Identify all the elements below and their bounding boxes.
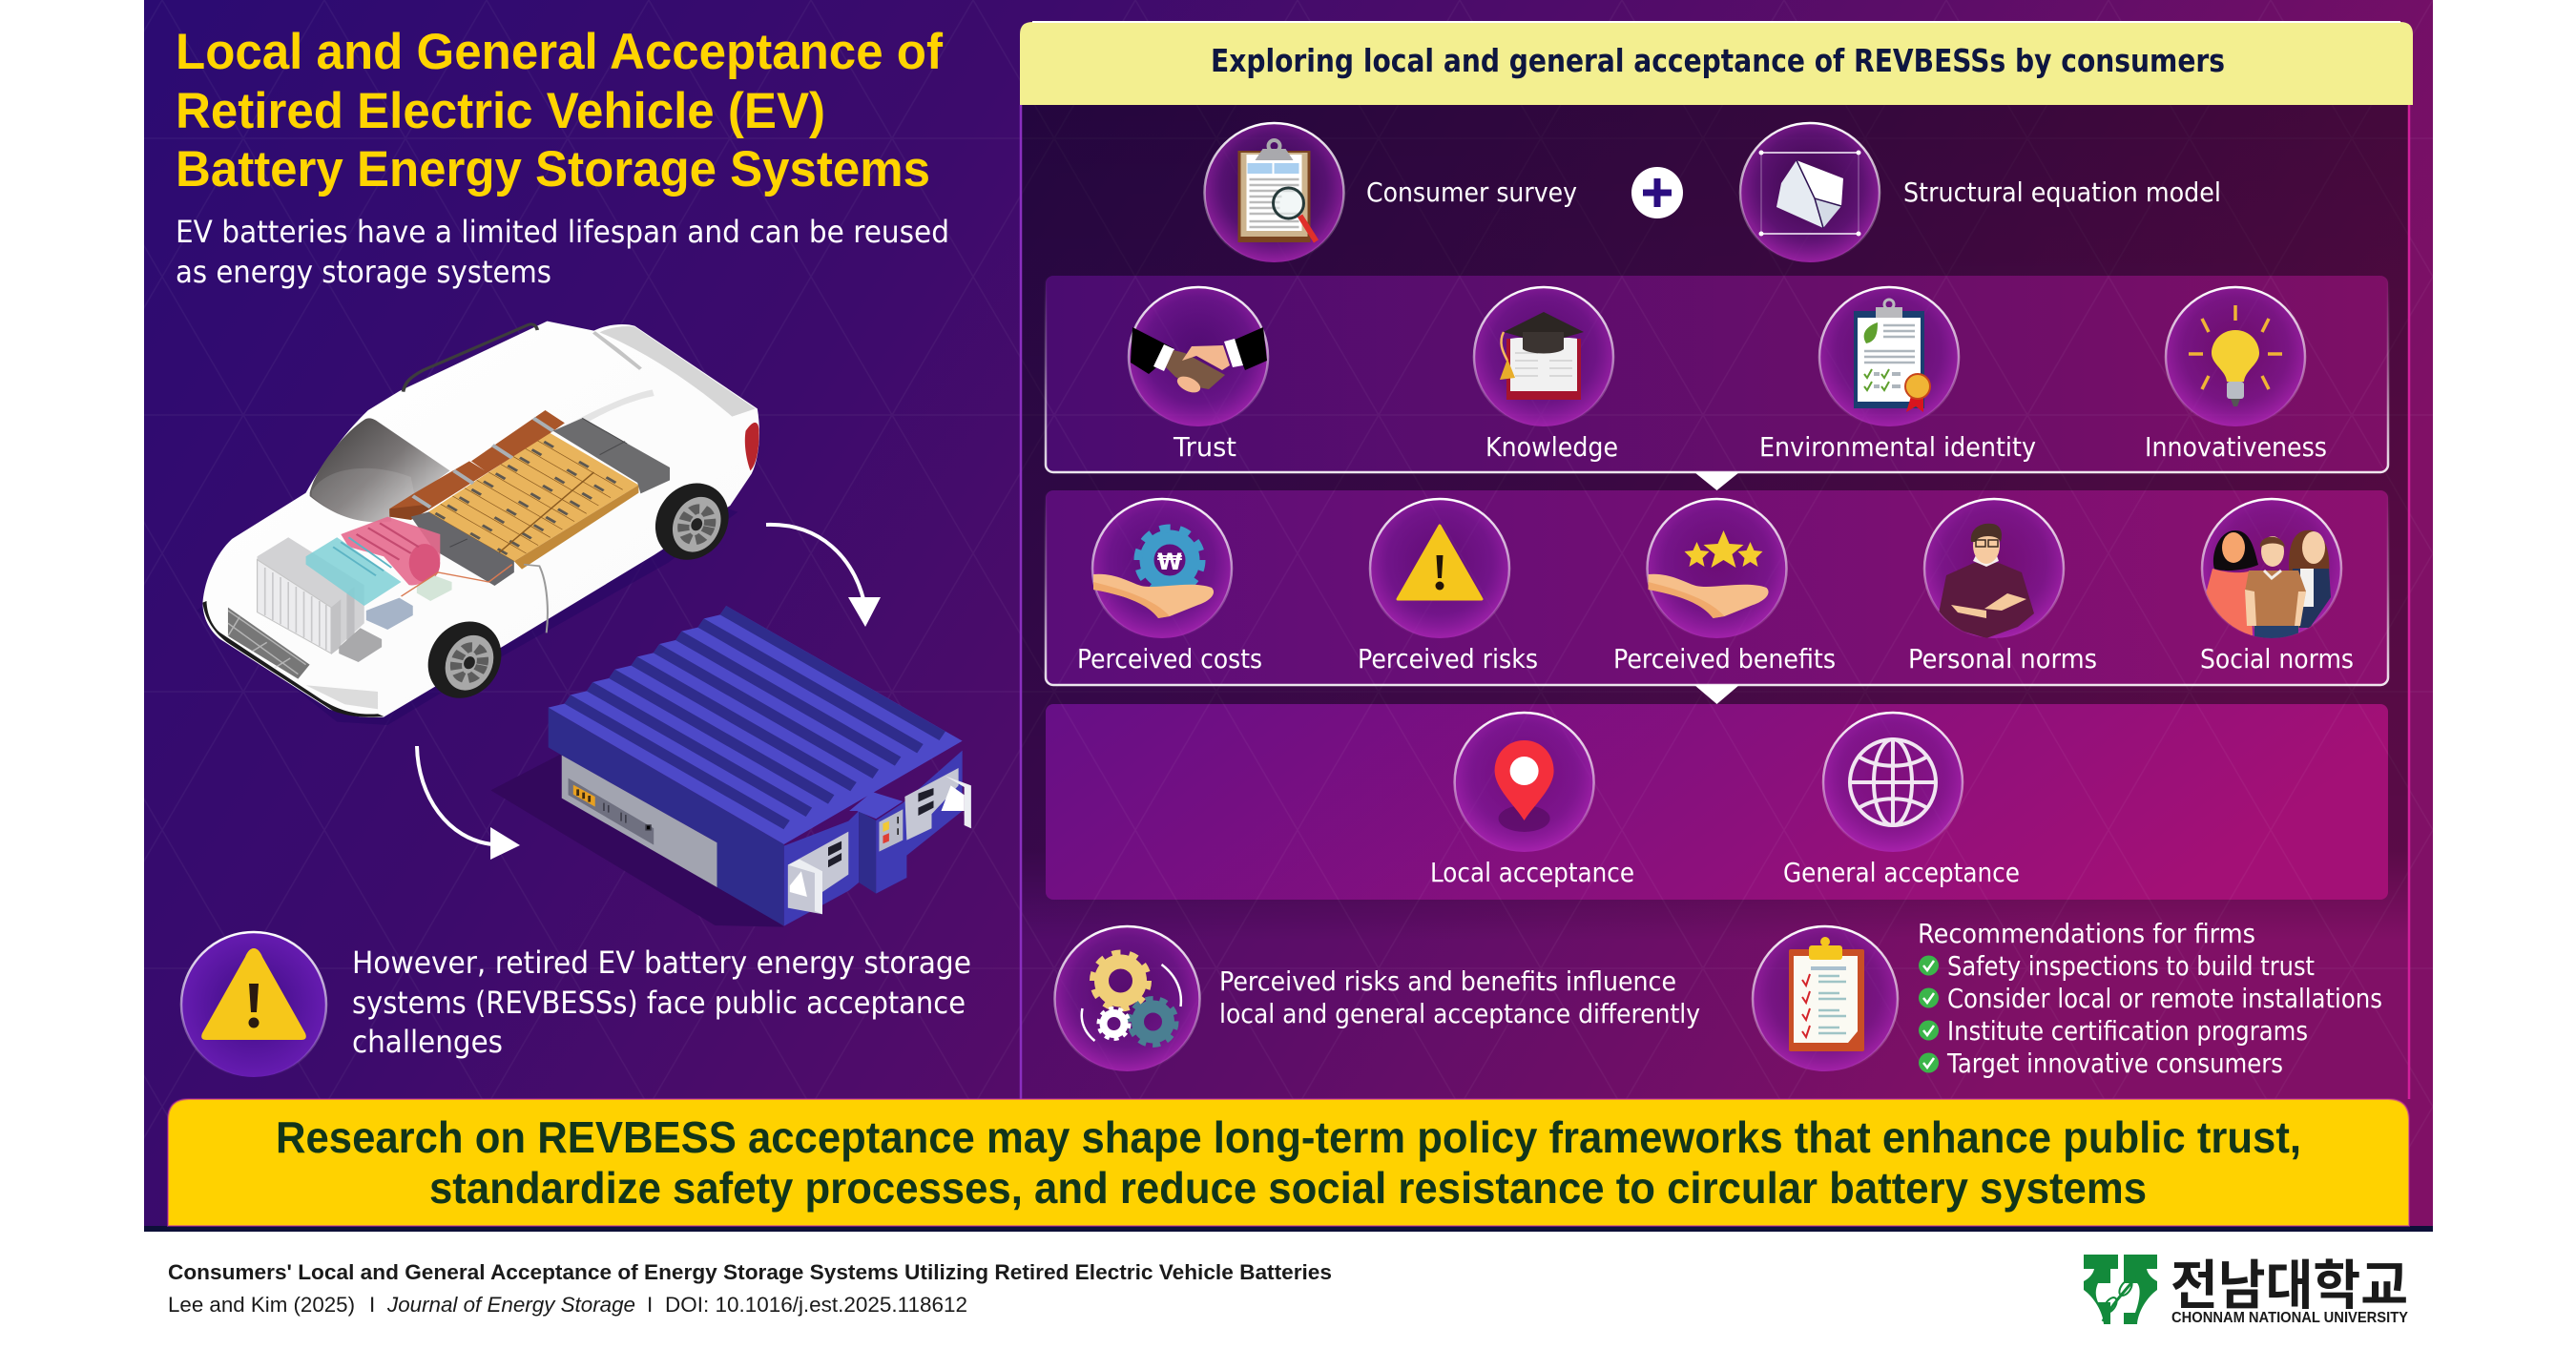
panel: acceptance outcomes	[1046, 704, 2388, 900]
brown modules	[389, 410, 565, 518]
text: finding: Perceived risks and benefits influence	[1219, 966, 1676, 997]
label: social norms: Social norms	[2200, 644, 2354, 674]
icon: plus	[1631, 167, 1683, 218]
label: trust: Trust	[1173, 432, 1236, 463]
icon: perceived risks	[1370, 499, 1509, 638]
icon: gears finding	[1055, 926, 1200, 1071]
conclusion banner	[168, 1099, 2409, 1226]
icon: personal norms	[1924, 499, 2064, 638]
title: Battery Energy Storage Systems	[176, 141, 930, 197]
text: structural equation model: Structural equation model	[1903, 177, 2221, 208]
icon: structural equation model	[1740, 123, 1880, 262]
icon: social norms	[2202, 499, 2341, 641]
label: environmental identity: Environmental identity	[1759, 432, 2036, 463]
intro text	[176, 214, 949, 290]
grey side panel	[562, 756, 717, 887]
text: finding	[1219, 966, 1700, 1029]
illustration: electric car with battery pack	[197, 322, 759, 725]
charging cable	[524, 565, 548, 633]
intro text: EV batteries have a limited lifespan and can be reused	[176, 214, 949, 250]
top fins	[549, 606, 963, 844]
recommendations list	[1918, 919, 2382, 1079]
label: knowledge: Knowledge	[1485, 432, 1618, 463]
citation: Consumers' Local and General Acceptance of Energy Storage Systems Utilizing Retired Electric Vehicle Batteries	[168, 1260, 1332, 1284]
label: perceived benefits: Perceived benefits	[1613, 644, 1836, 674]
recommendations list: Target innovative consumers	[1946, 1048, 2283, 1079]
intro text: as energy storage systems	[176, 254, 551, 290]
title: Local and General Acceptance of	[176, 24, 943, 80]
arrow: battery reuse	[417, 746, 520, 860]
text: finding: local and general acceptance differently	[1219, 999, 1700, 1029]
front face	[549, 708, 784, 926]
title	[176, 24, 943, 197]
panel: perceptions and norms	[1046, 490, 2388, 685]
arrow: car to battery	[766, 525, 881, 627]
grey modules	[553, 418, 670, 493]
icon: perceived costs: ₩	[1157, 549, 1183, 575]
logo: Chonnam National University: CHONNAM NATIONAL UNIVERSITY	[2171, 1310, 2408, 1326]
label: general acceptance: General acceptance	[1783, 858, 2020, 888]
rear wheel	[646, 477, 738, 567]
label: personal norms: Personal norms	[1908, 644, 2097, 674]
icon: perceived costs	[1092, 499, 1232, 638]
arrow: perceptions to acceptance	[1694, 685, 1739, 704]
icon: recommendations clipboard	[1753, 926, 1898, 1071]
small boxes	[366, 598, 413, 630]
icon: environmental identity	[1819, 287, 1959, 426]
illustration: battery storage system	[490, 606, 971, 927]
citation: I	[647, 1293, 653, 1317]
battery shadow	[490, 754, 784, 927]
logo: Chonnam National University: 전남대학교	[2171, 1256, 2408, 1316]
label: perceived costs: Perceived costs	[1077, 644, 1262, 674]
warning text: However, retired EV battery energy storage	[352, 944, 971, 981]
motor	[341, 517, 440, 585]
title: Retired Electric Vehicle (EV)	[176, 83, 825, 139]
conclusion banner: standardize safety processes, and reduce social resistance to circular battery systems	[429, 1163, 2147, 1213]
car shadow	[197, 496, 737, 725]
citation	[168, 1260, 1332, 1317]
citation: Journal of Energy Storage	[386, 1293, 635, 1317]
recommendations list: Consider local or remote installations	[1947, 984, 2382, 1014]
car body	[202, 322, 759, 717]
citation: Lee and Kim (2025)	[168, 1293, 355, 1317]
header bar	[1020, 22, 2413, 105]
citation: I	[369, 1293, 375, 1317]
arrow: factors to perceptions	[1694, 472, 1739, 490]
panel: study framework	[1020, 22, 2413, 1102]
icon: knowledge	[1474, 287, 1613, 426]
recommendations list: Recommendations for firms	[1918, 919, 2255, 949]
label: innovativeness: Innovativeness	[2145, 432, 2327, 463]
radiator	[258, 537, 364, 654]
battery tray	[428, 432, 638, 561]
right end face	[784, 811, 859, 926]
recommendations list: Safety inspections to build trust	[1947, 951, 2315, 982]
citation: DOI: 10.1016/j.est.2025.118612	[665, 1293, 967, 1317]
end plates	[788, 832, 848, 914]
front wheel	[419, 615, 510, 705]
label: perceived risks: Perceived risks	[1358, 644, 1538, 674]
conclusion banner: Research on REVBESS acceptance may shape long-term policy frameworks that enhance public trust,	[276, 1112, 2301, 1162]
warning text	[352, 944, 971, 1060]
logo: Chonnam National University	[2084, 1255, 2408, 1326]
icon: innovativeness	[2166, 287, 2305, 426]
icon: perceived benefits	[1647, 499, 1786, 638]
coolant	[306, 537, 402, 606]
panel: antecedent factors	[1046, 276, 2388, 472]
grille	[228, 608, 310, 679]
text: consumer survey: Consumer survey	[1366, 177, 1577, 208]
recommendations list: Institute certification programs	[1947, 1016, 2308, 1047]
icon: consumer survey	[1204, 123, 1343, 262]
header bar: Exploring local and general acceptance of REVBESSs by consumers	[1211, 42, 2225, 79]
icon: general acceptance	[1823, 713, 1963, 852]
warning icon	[181, 932, 326, 1077]
windshield	[310, 418, 450, 522]
warning text: challenges	[352, 1024, 503, 1060]
label: local acceptance: Local acceptance	[1430, 858, 1634, 888]
roof rail	[404, 324, 537, 392]
icon: local acceptance	[1455, 713, 1594, 852]
icon: trust handshake	[1129, 287, 1268, 426]
warning text: systems (REVBESSs) face public acceptance	[352, 985, 966, 1021]
